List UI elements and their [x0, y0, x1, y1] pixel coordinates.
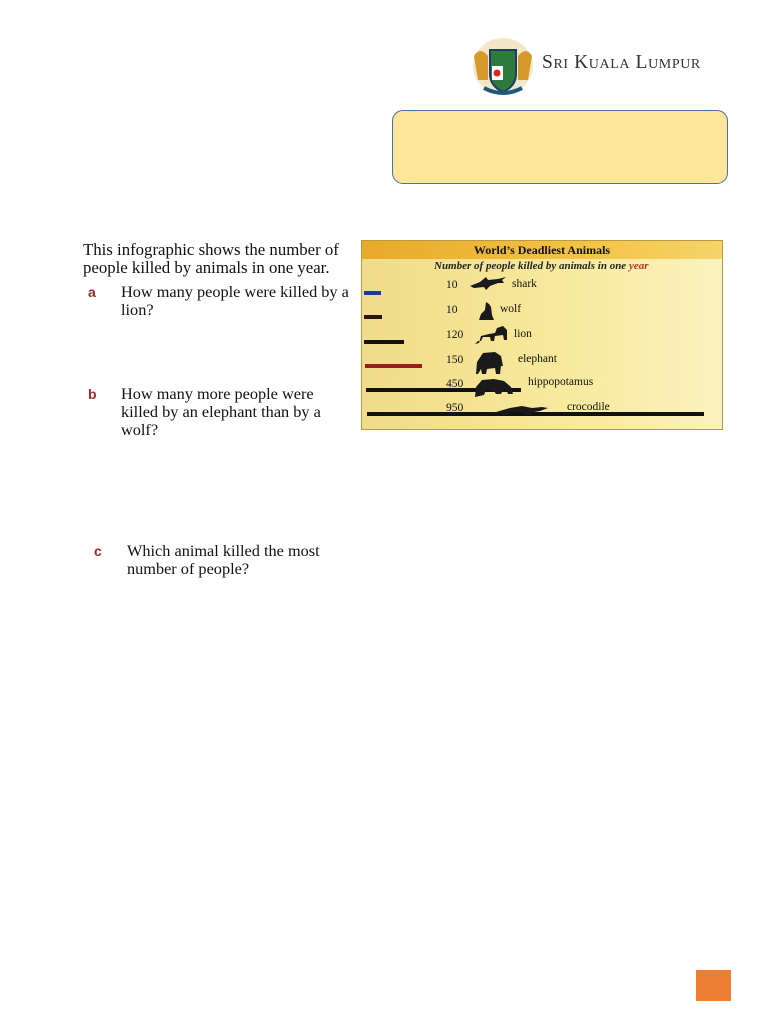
question b: b	[88, 386, 97, 402]
chart title	[362, 241, 722, 259]
chart: world's deadliest animals: 10	[446, 279, 458, 291]
chart subtitle: Number of people killed by animals in one year	[434, 260, 648, 272]
name box	[392, 110, 728, 184]
question a: a	[88, 284, 96, 300]
icons: animal silhouettes	[470, 277, 548, 415]
chart: world's deadliest animals: 10	[446, 304, 458, 316]
chart: world's deadliest animals: lion	[514, 328, 532, 340]
brand name: Sri Kuala Lumpur	[542, 52, 701, 73]
chart: world's deadliest animals: 150	[446, 354, 463, 366]
question b: How many more people were killed by an elephant than by a wolf?	[121, 384, 321, 439]
chart: world's deadliest animals	[361, 240, 723, 430]
page number box	[696, 970, 731, 1001]
chart: world's deadliest animals: 450	[446, 378, 463, 390]
chart: world's deadliest animals: hippopotamus	[528, 376, 593, 388]
chart: world's deadliest animals: wolf	[500, 303, 521, 315]
chart: world's deadliest animals: 120	[446, 329, 463, 341]
chart: world's deadliest animals: 950	[446, 402, 463, 414]
bars	[364, 291, 381, 295]
icon: school crest	[473, 38, 533, 95]
logo	[473, 38, 701, 95]
chart title: World’s Deadliest Animals	[474, 243, 610, 257]
question c: c	[94, 543, 102, 559]
chart: world's deadliest animals: shark	[512, 278, 537, 290]
chart: world's deadliest animals: crocodile	[567, 401, 610, 413]
chart: world's deadliest animals: elephant	[518, 353, 557, 365]
intro text: This infographic shows the number of people killed by animals in one year.	[83, 240, 339, 277]
question a: How many people were killed by a lion?	[121, 282, 349, 319]
labels	[446, 279, 463, 414]
question c: Which animal killed the most number of people?	[127, 541, 320, 578]
